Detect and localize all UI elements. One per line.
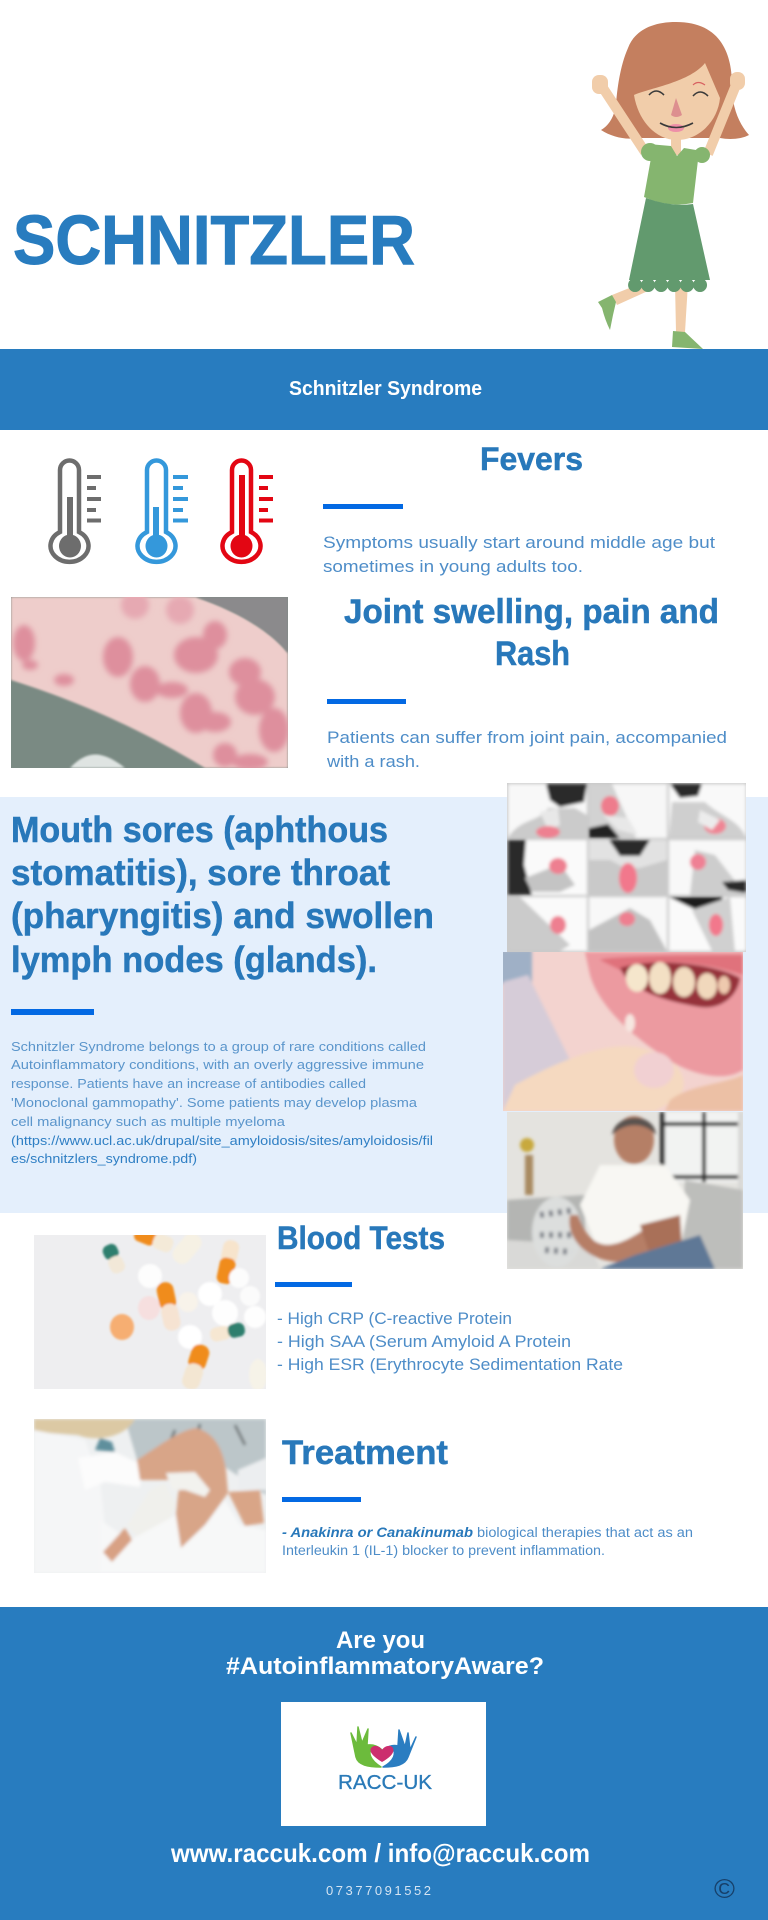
icon: heart	[370, 1746, 394, 1762]
icon: blue hand	[383, 1730, 416, 1767]
heading: mouth sores	[11, 809, 434, 980]
photo: mouth ulcer	[500, 950, 743, 1111]
heading: mouth sores: lymph nodes (glands).	[11, 939, 377, 980]
heading: mouth sores: Mouth sores (aphthous	[11, 809, 388, 850]
photo: man with stomach pain	[507, 1112, 743, 1269]
photo: rash on arm	[11, 591, 289, 770]
heading: mouth sores: (pharyngitis) and swollen	[11, 895, 434, 936]
photo: injection treatment	[34, 1419, 266, 1573]
phone number: 07377091552	[326, 1883, 431, 1898]
heading: Fevers: Fevers	[480, 441, 583, 477]
text: joints description	[326, 728, 727, 771]
photo: pills	[34, 1224, 267, 1392]
logo text: RACC-UK	[338, 1772, 433, 1794]
footer heading: Are you	[336, 1627, 425, 1654]
text: condition description: Autoinflammatory conditions, with an overly aggressive immune	[11, 1057, 424, 1072]
text: Fevers description: sometimes in young adults too.	[323, 557, 583, 576]
heading: treatment: Treatment	[282, 1434, 448, 1472]
heading: blood tests: Blood Tests	[277, 1220, 445, 1256]
text: condition description: (https://www.ucl.ac.uk/drupal/site_amyloidosis/sites/amyloidosis/fil	[11, 1133, 433, 1148]
accent bar: Fevers	[323, 504, 403, 509]
panel: mouth sores	[0, 797, 768, 1213]
text: joints description: Patients can suffer from joint pain, accompanied	[327, 728, 727, 747]
text: condition description: response. Patients have an increase of antibodies called	[11, 1076, 366, 1091]
text: condition description: Schnitzler Syndrome belongs to a group of rare conditions called	[11, 1039, 426, 1054]
copyright mark: ©	[714, 1874, 735, 1904]
contact links: www.raccuk.com / info@raccuk.com	[170, 1838, 590, 1868]
banner	[0, 349, 768, 430]
accent bar: blood tests	[275, 1282, 352, 1287]
text: joints description: with a rash.	[326, 752, 420, 771]
text: treatment description	[282, 1525, 693, 1558]
text: treatment description: - Anakinra or Canakinumab	[282, 1525, 473, 1540]
footer heading	[226, 1627, 544, 1680]
text: condition description	[11, 1039, 433, 1166]
footer panel	[0, 1607, 768, 1920]
heading: joint swelling, pain and rash: Rash	[495, 635, 570, 673]
text: blood test list: - High ESR (Erythrocyte Sedimentation Rate	[277, 1355, 623, 1374]
text: condition description: es/schnitzlers_syndrome.pdf)	[11, 1151, 197, 1166]
text: treatment description: Interleukin 1 (IL-1) blocker to prevent inflammation.	[282, 1543, 605, 1558]
heading: joint swelling, pain and rash	[344, 593, 719, 673]
footer heading: #AutoinflammatoryAware?	[226, 1653, 544, 1680]
accent bar: mouth sores	[11, 1009, 94, 1015]
text: condition description: cell malignancy such as multiple myeloma	[11, 1114, 286, 1129]
text: treatment description: biological therapies that act as an	[477, 1525, 693, 1540]
text: condition description: 'Monoclonal gammopathy'. Some patients may develop plasma	[11, 1095, 418, 1110]
text: blood test list: - High SAA (Serum Amyloid A Protein	[277, 1332, 571, 1351]
text: blood test list: - High CRP (C-reactive Protein	[277, 1309, 512, 1328]
banner title: Schnitzler Syndrome	[289, 378, 482, 400]
heading: joint swelling, pain and rash: Joint swelling, pain and	[344, 593, 719, 631]
accent bar: treatment	[282, 1497, 361, 1502]
illustration: cheering woman	[592, 22, 749, 349]
heading: mouth sores: stomatitis), sore throat	[11, 852, 390, 893]
photo grid: joint pain	[507, 783, 746, 952]
text: Fevers description: Symptoms usually start around middle age but	[323, 533, 715, 552]
accent bar: joints	[327, 699, 406, 704]
text: blood test list	[277, 1309, 623, 1374]
text: Fevers description	[323, 533, 715, 576]
icon: green hand	[351, 1727, 382, 1767]
icon: three thermometers	[50, 461, 273, 562]
title: SCHNITZLER	[13, 201, 415, 279]
logo: RACC-UK	[281, 1702, 486, 1826]
